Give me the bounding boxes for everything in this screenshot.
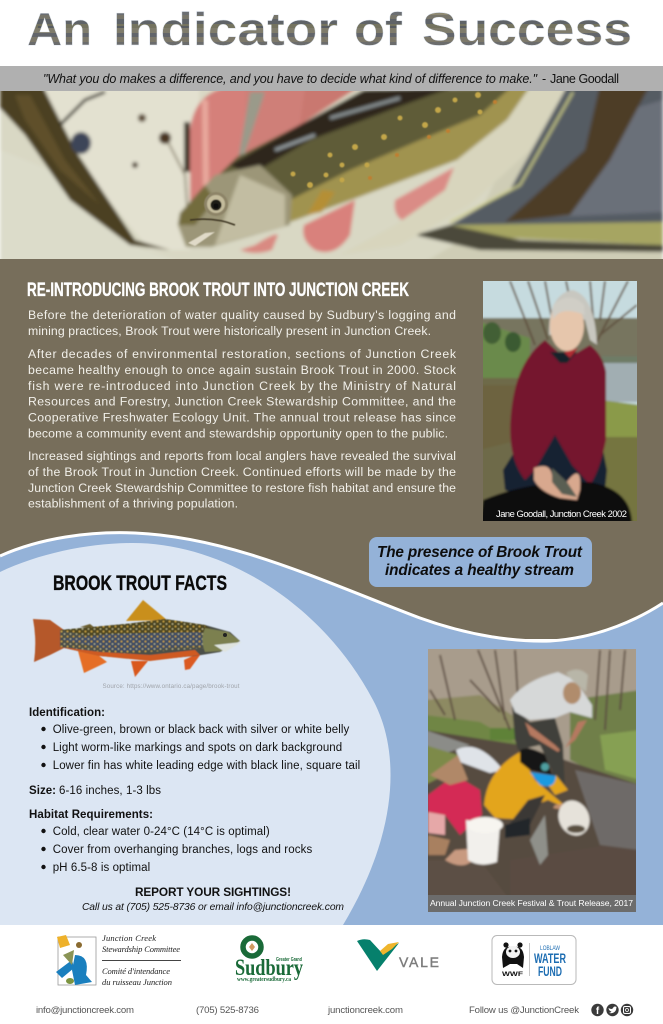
logo: WWF Loblaw Water Fund: WWF (502, 971, 523, 978)
text block: report your sightings (82, 885, 344, 913)
text block: history of brook trout: of the Brook Trout in Junction Creek. Continued efforts will be made by the (28, 465, 456, 479)
icon: instagram (621, 1004, 633, 1016)
logo: Junction Creek Stewardship Committee: Junction Creek (102, 933, 156, 943)
text block: report your sightings: REPORT YOUR SIGHTINGS! (135, 885, 291, 899)
text block: size: 6-16 inches, 1-3 lbs (59, 785, 161, 797)
quote band: Jane Goodall (550, 72, 619, 86)
callout: healthy stream: The presence of Brook Trout (377, 544, 583, 561)
text block: habitat requirements: Cold, clear water 0-24°C (14°C is optimal) (53, 826, 270, 838)
text block: identification: Olive-green, brown or black back with silver or white belly (53, 724, 349, 736)
heading: re-introducing brook trout: RE-INTRODUCING BROOK TROUT INTO JUNCTION CREEK (27, 279, 409, 301)
text block: habitat requirements: Cover from overhanging branches, logs and rocks (53, 844, 312, 856)
logo: Greater Sudbury: www.greatersudbury.ca (237, 977, 291, 983)
footer contact details: Follow us @JunctionCreek (469, 1005, 579, 1016)
title: An (27, 3, 92, 55)
title (27, 3, 632, 55)
photo: annual trout release festival (425, 646, 640, 916)
quote band (0, 66, 663, 91)
illustration: brook trout (33, 600, 242, 677)
wave: blue and white curved shapes (0, 533, 663, 925)
text block: identification: Lower fin has white leading edge with black line, square tail (53, 760, 360, 772)
photo: Jane Goodall at Junction Creek (480, 278, 640, 524)
text block: history of brook trout: Before the deterioration of water quality caused by Sudbury's logging and (28, 308, 456, 322)
title: Success (422, 3, 632, 55)
photo: brook trout held in a bucket (0, 85, 663, 265)
text block: habitat requirements (29, 809, 312, 874)
text block: history of brook trout: mining practices, Brook Trout were historically present in Junction Creek. (28, 324, 431, 338)
text block: identification: Identification: (29, 707, 105, 719)
title: Indicator (113, 3, 338, 55)
logo: WWF Loblaw Water Fund: LOBLAW (540, 946, 560, 952)
logo: Junction Creek Stewardship Committee: du ruisseau Junction (102, 977, 172, 987)
title: of (354, 3, 403, 55)
photo: Jane Goodall at Junction Creek: Jane Goodall, Junction Creek 2002 (496, 508, 627, 519)
logo: Vale: VALE (399, 954, 439, 970)
footer background (0, 925, 663, 1024)
text block: history of brook trout: Resources and Forestry, Junction Creek Stewardship Committee, and the (28, 394, 456, 408)
text block: history of brook trout: After decades of environmental restoration, sections of Junction Creek (28, 347, 457, 361)
logo: Vale (357, 939, 439, 971)
icon: facebook (591, 1004, 604, 1017)
logo: Junction Creek Stewardship Committee: Comité d'intendance (102, 966, 170, 976)
text block: history of brook trout: became healthy enough to once again sustain Brook Trout in 2000. Stock (28, 363, 457, 377)
text block: size: Size: (29, 785, 56, 797)
logo: WWF Loblaw Water Fund: FUND (538, 963, 562, 979)
icon: twitter (606, 1004, 619, 1016)
callout: healthy stream (369, 537, 592, 587)
logo: Junction Creek Stewardship Committee (56, 933, 181, 987)
text block: history of brook trout (28, 308, 457, 510)
heading: brook trout facts: BROOK TROUT FACTS (53, 572, 227, 595)
text block: habitat requirements: pH 6.5-8 is optimal (53, 862, 150, 874)
footer contact details (36, 1005, 579, 1016)
quote band: "What you do makes a difference, and you have to decide what kind of difference to make." (43, 72, 538, 86)
icon: facebook: f (596, 1006, 600, 1017)
footer contact details: junctioncreek.com (327, 1005, 403, 1016)
text block: identification (29, 707, 360, 772)
logo: Greater Sudbury: Sudbury (235, 955, 303, 980)
text block: history of brook trout: establishment of a thriving population. (28, 496, 238, 510)
logo: Junction Creek Stewardship Committee: Stewardship Committee (102, 944, 180, 954)
logo: Greater Sudbury (235, 938, 303, 983)
text block: identification: Light worm-like markings and spots on dark background (53, 742, 342, 754)
text block: report your sightings: Call us at (705) 525-8736 or email info@junctioncreek.com (82, 902, 344, 913)
quote band: - (542, 72, 546, 86)
footer contact details: (705) 525-8736 (196, 1005, 259, 1016)
logo: Greater Sudbury: Greater Grand (276, 957, 302, 963)
source note: Source: https://www.ontario.ca/page/brook-trout (102, 683, 240, 690)
logo: WWF Loblaw Water Fund (492, 936, 576, 984)
text block: history of brook trout: fish were re-introduced into Junction Creek by the Ministry of Natural (28, 379, 456, 393)
text block: habitat requirements: Habitat Requirements: (29, 809, 153, 821)
text block: history of brook trout: Junction Creek Stewardship Committee to restore fish habitat and ensure the (28, 481, 456, 495)
footer contact details: info@junctioncreek.com (36, 1005, 134, 1016)
text block: history of brook trout: become a community event and stewardship opportunity open to the public. (28, 426, 448, 440)
panel: brown background (0, 259, 663, 639)
text block: history of brook trout: Increased sightings and reports from local anglers have revealed the survival (28, 449, 456, 463)
logo: WWF Loblaw Water Fund: WATER (534, 951, 566, 966)
text block: history of brook trout: Cooperative Freshwater Ecology Unit. The annual trout release has since (28, 410, 456, 424)
photo: annual trout release festival: Annual Junction Creek Festival & Trout Release, 2017 (430, 898, 633, 908)
callout: healthy stream: indicates a healthy stream (385, 562, 574, 579)
